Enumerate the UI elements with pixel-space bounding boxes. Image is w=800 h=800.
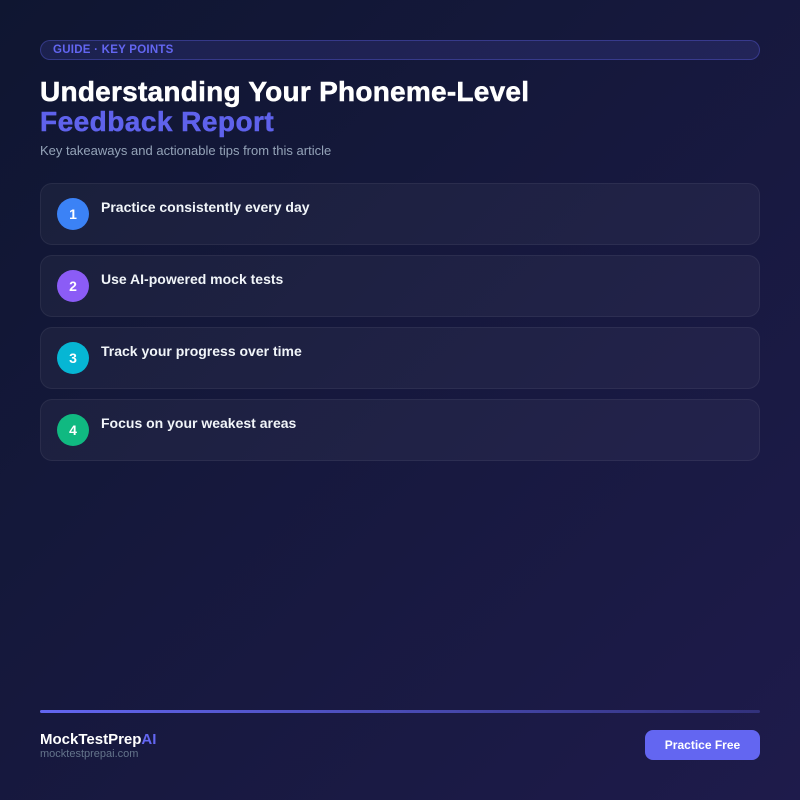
subtitle: Key takeaways and actionable tips from this article [40,143,331,158]
icon: number 3: 3 [69,350,77,366]
footer accent bar [40,710,760,713]
tag: guide key points [40,40,760,60]
panel: key point 1 [40,183,760,245]
icon: number 2: 2 [69,278,77,294]
title: Understanding Your Phoneme-Level [40,76,529,106]
icon: number 1: 1 [69,206,77,222]
panel: key point 4 [40,399,760,461]
text: key point 2: Use AI-powered mock tests [101,271,283,287]
button: practice free [645,730,760,760]
brand name: MockTestPrepAI [40,731,156,748]
icon: number 2 [57,270,89,302]
button: practice free: Practice Free [665,738,740,752]
panel: key point 3 [40,327,760,389]
icon: number 4 [57,414,89,446]
icon: number 4: 4 [69,422,77,438]
title: Feedback Report [40,106,274,137]
icon: number 1 [57,198,89,230]
tag: guide key points: GUIDE · KEY POINTS [53,44,174,56]
text: key point 1: Practice consistently every day [101,199,310,215]
icon: number 3 [57,342,89,374]
title [40,76,529,138]
text: key point 3: Track your progress over time [101,343,302,359]
panel: key point 2 [40,255,760,317]
brand url: mocktestprepai.com [40,748,138,760]
text: key point 4: Focus on your weakest areas [101,415,296,431]
